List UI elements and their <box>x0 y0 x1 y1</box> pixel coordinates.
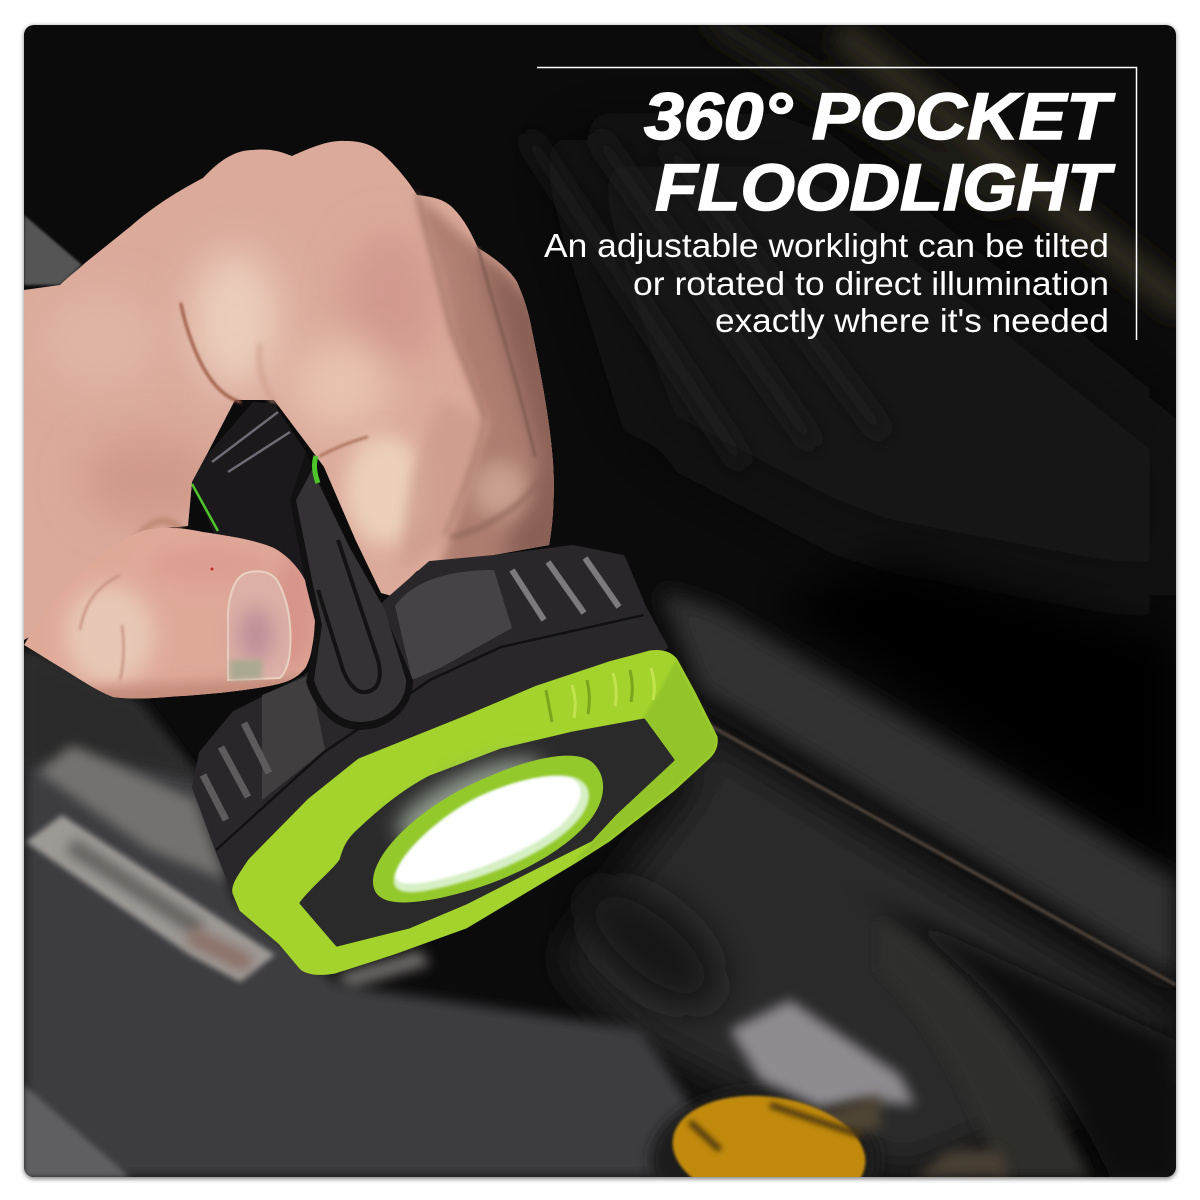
bezel right shade <box>573 660 716 863</box>
pale strip below bezel <box>335 950 430 988</box>
dark ring around cap <box>644 1094 874 1177</box>
heading frame <box>537 68 1136 340</box>
pale knuckle <box>190 250 280 390</box>
green lens ring <box>373 756 603 902</box>
handle textured band <box>296 470 406 722</box>
thumb red tip <box>275 552 315 670</box>
handle green trim right <box>315 456 318 483</box>
white bracket <box>730 1000 915 1108</box>
description <box>544 227 1109 339</box>
palm shadow near thumb <box>80 435 220 525</box>
hand <box>24 140 554 698</box>
lens rim <box>394 776 589 892</box>
handle inner slot <box>318 540 380 692</box>
bezel grip notches <box>572 668 654 718</box>
description line two: or rotated to direct illumination <box>633 265 1109 302</box>
handle green trim left <box>192 484 218 531</box>
small cut <box>210 568 214 570</box>
thumb joint highlight <box>65 585 155 685</box>
brown bracket tip <box>815 1095 880 1135</box>
thumbnail <box>228 571 290 680</box>
thin brown line <box>700 720 1176 985</box>
white label lower <box>26 815 275 982</box>
yellow radiator cap <box>670 1094 868 1177</box>
finger joint shade <box>400 406 476 561</box>
grip ribs top <box>512 558 619 620</box>
grey diagonal band <box>660 590 1176 980</box>
nail discolouration <box>238 607 274 663</box>
rear body housing <box>194 547 666 893</box>
red knuckle blush <box>346 236 432 359</box>
index knuckle highlight <box>290 340 390 430</box>
thumb joint creases <box>80 575 124 680</box>
lit diagonal area upper right <box>608 166 1150 562</box>
lens <box>396 777 581 884</box>
heading line two: FLOODLIGHT <box>655 150 1115 224</box>
heading line one: 360° POCKET <box>644 79 1115 153</box>
heading <box>644 79 1115 224</box>
cap markings <box>690 1105 860 1150</box>
brown patch bottom right <box>915 1150 1010 1177</box>
dark pocket by bezel <box>588 876 732 1021</box>
lens white bloom <box>387 743 553 857</box>
thumb <box>24 528 315 698</box>
handle top ridge lines <box>212 412 290 472</box>
hand back and fingers <box>24 140 554 640</box>
finger creases <box>135 195 538 540</box>
description line three: exactly where it's needed <box>715 302 1109 339</box>
inner black face <box>301 720 673 945</box>
mid grey area lower centre <box>560 700 1176 1177</box>
green bezel <box>234 652 716 973</box>
strap left <box>24 215 82 285</box>
body groove line <box>216 615 644 850</box>
ribbed hose <box>982 1093 1090 1177</box>
bezel grip grooves <box>546 670 632 722</box>
thumb underside <box>40 675 320 720</box>
near-black region right <box>816 564 1165 843</box>
lower finger highlight <box>345 435 425 545</box>
nail base green tint <box>230 660 262 680</box>
white label upper <box>38 745 225 880</box>
lower left slab <box>24 1085 130 1177</box>
left grey slab <box>24 650 740 1177</box>
pinky and ring shade <box>416 197 554 560</box>
grey shoulder right of handle <box>395 570 512 680</box>
slab darker top <box>28 660 190 778</box>
diagonal ribs upper right <box>530 25 1176 460</box>
description line one: An adjustable worklight can be tilted <box>544 227 1109 264</box>
floodlight carry handle behind thumb placeholder <box>192 402 306 580</box>
dark gap below line <box>892 910 1176 1177</box>
handle outer band <box>290 452 413 730</box>
grip ribs left <box>203 723 269 820</box>
floodlight <box>192 412 716 973</box>
grey shoulder left of handle <box>262 675 325 800</box>
